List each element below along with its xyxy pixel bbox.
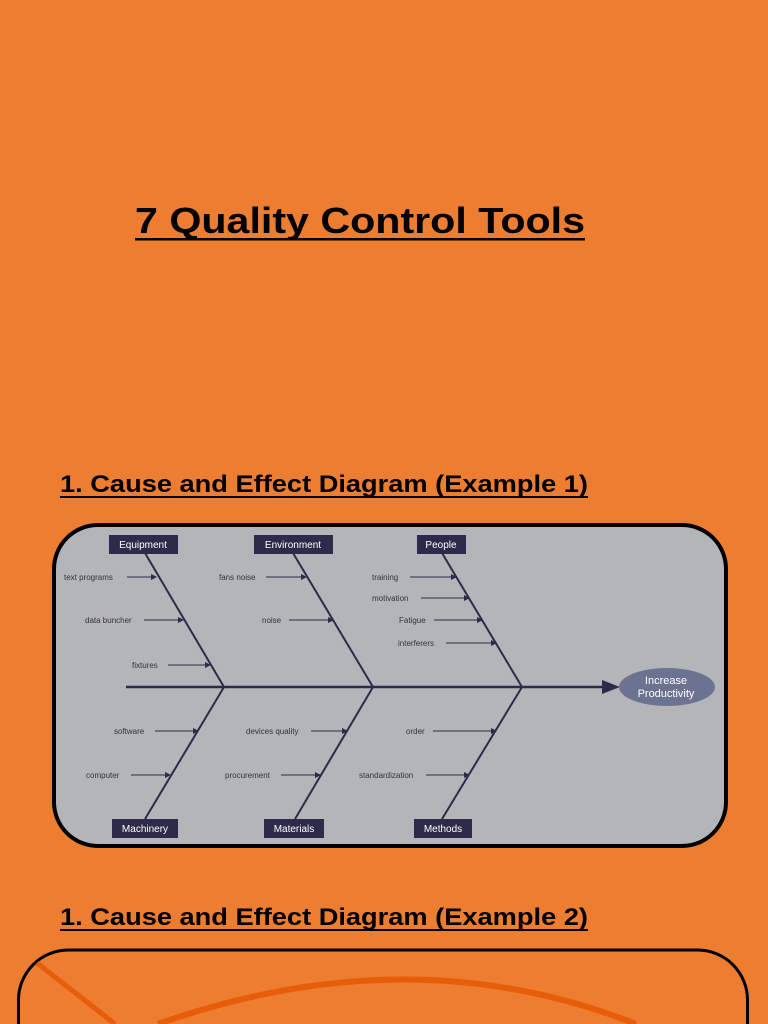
category labels xyxy=(109,535,472,838)
cause texts: procurement xyxy=(225,771,271,780)
cause arrows xyxy=(127,577,493,775)
spine arrow xyxy=(126,680,620,694)
cause texts: software xyxy=(114,727,145,736)
cause texts: standardization xyxy=(359,771,413,780)
effect: Increase Productivity: Productivity xyxy=(638,688,695,700)
cause texts: noise xyxy=(262,616,282,625)
cause texts: text programs xyxy=(64,573,113,582)
cause texts xyxy=(64,573,434,780)
cause texts: devices quality xyxy=(246,727,298,736)
cause texts: interferers xyxy=(398,639,434,648)
title: 7 Quality Control Tools xyxy=(135,200,585,241)
cause texts: fans noise xyxy=(219,573,256,582)
cause texts: fixtures xyxy=(132,661,158,670)
category labels: Machinery xyxy=(122,824,168,835)
category labels: Materials xyxy=(274,824,314,835)
category labels: Methods xyxy=(424,824,462,835)
cause texts: order xyxy=(406,727,425,736)
category labels: People xyxy=(425,540,457,551)
cause texts: data buncher xyxy=(85,616,132,625)
heading: example 1: 1. Cause and Effect Diagram (Example 1) xyxy=(60,471,588,498)
cause texts: training xyxy=(372,573,398,582)
panel: example 2 diagram (cropped) xyxy=(18,950,748,1024)
cause texts: Fatigue xyxy=(399,616,426,625)
panel: fishbone diagram xyxy=(54,525,726,846)
effect: Increase Productivity: Increase xyxy=(645,675,687,687)
heading: example 2: 1. Cause and Effect Diagram (Example 2) xyxy=(60,904,588,931)
cause texts: computer xyxy=(86,771,120,780)
cause texts: motivation xyxy=(372,594,408,603)
category labels: Equipment xyxy=(119,540,167,551)
bones xyxy=(145,553,522,819)
effect: Increase Productivity xyxy=(619,668,715,706)
category labels: Environment xyxy=(265,540,321,551)
